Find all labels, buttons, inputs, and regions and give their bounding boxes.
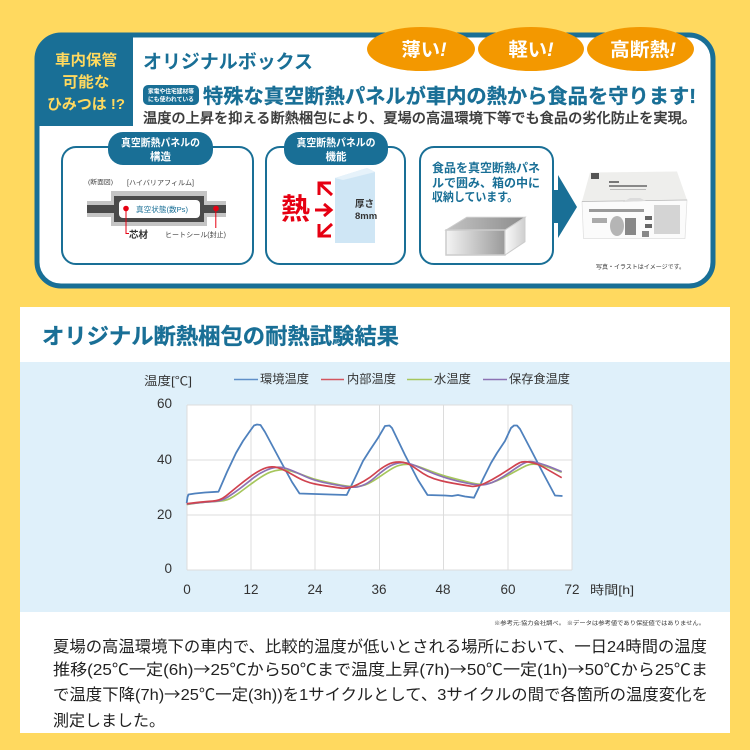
card: structure <box>62 132 253 264</box>
badge: light <box>478 27 584 71</box>
card text: 食品を真空断熱パネ <box>432 160 540 175</box>
badge: also used in appliances <box>143 85 199 105</box>
card heading: 真空断熱パネルの <box>121 136 200 149</box>
axis labels: 12 <box>243 582 259 597</box>
body text: 測定しました。 <box>53 712 165 730</box>
axis labels: 温度[℃] <box>144 374 192 388</box>
legend: 水温度 <box>434 372 471 386</box>
left tab: 車内保管 <box>55 51 117 69</box>
body text <box>53 638 708 730</box>
heading: オリジナル断熱梱包の耐熱試験結果 <box>42 324 399 349</box>
axis labels: 48 <box>435 582 451 597</box>
axis labels: 0 <box>164 561 172 576</box>
cross-section diagram: 芯材 <box>129 229 148 241</box>
legend: 保存食温度 <box>509 372 570 386</box>
body text: で温度下降(7h)→25℃一定(3h))を1サイクルとして、3サイクルの間で各箇所の温度変化を <box>53 681 708 705</box>
axis labels: 24 <box>307 582 323 597</box>
cross-section diagram: [ハイバリアフィルム] <box>127 179 194 187</box>
body text: 推移(25℃一定(6h) →25℃から50℃まで温度上昇(7h) →50℃一定(1h) →50℃から25℃ま <box>53 656 708 680</box>
headline: 特殊な真空断熱パネルが車内の熱から食品を守ります! <box>203 84 696 108</box>
insulation panel: 厚さ <box>355 199 374 210</box>
card heading: 真空断熱パネルの <box>296 136 376 149</box>
insulation panel: 8mm <box>355 211 377 222</box>
axis labels: 60 <box>500 582 516 597</box>
axis labels: 0 <box>183 582 191 597</box>
legend <box>234 372 570 386</box>
card heading <box>108 132 213 165</box>
card: stored in box <box>420 147 553 264</box>
line: ambient temperature <box>187 424 562 503</box>
line: stored food temperature <box>187 462 562 504</box>
chart: temperature <box>20 362 730 612</box>
axis labels: 60 <box>157 396 172 411</box>
card text: 収納しています。 <box>432 189 518 204</box>
axis labels: 20 <box>157 507 172 522</box>
line: water temperature <box>187 464 562 504</box>
left tab: ひみつは !? <box>47 96 125 113</box>
cross-section diagram: 真空状態(数Ps) <box>136 204 189 214</box>
left tab <box>37 35 133 126</box>
heading: original box: オリジナルボックス <box>143 51 313 73</box>
axis labels: 時間[h] <box>590 583 634 597</box>
badge: also used in appliances: 家電や住宅建材等 <box>148 88 194 96</box>
footnote: ※参考元:協力会社調べ。 ※データは参考値であり保証値ではありません。 <box>494 619 705 627</box>
card text <box>432 160 540 204</box>
axis labels: 40 <box>157 452 172 467</box>
heat label: 熱 <box>281 193 310 226</box>
axis labels: 72 <box>564 582 580 597</box>
photo: product box <box>582 172 687 238</box>
card text: ルで囲み、箱の中に <box>432 175 540 190</box>
panel: heat test result <box>20 307 730 733</box>
arrows: heat reflected <box>315 183 332 236</box>
icon: silver panel box <box>446 217 525 255</box>
panel: original box <box>37 27 713 286</box>
cross-section diagram: ヒートシール(封止) <box>165 230 226 239</box>
axis labels <box>144 374 634 597</box>
cross-section diagram: (断面図) <box>88 177 113 186</box>
cross-section diagram <box>87 177 226 241</box>
badge: high insulation: 高断熱! <box>610 39 676 61</box>
description: 温度の上昇を抑える断熱梱包により、夏場の高温環境下等でも食品の劣化防止を実現。 <box>143 110 696 126</box>
axis labels: 36 <box>371 582 387 597</box>
badge: thin <box>367 27 475 71</box>
line: internal temperature <box>187 462 562 504</box>
card heading: 機能 <box>326 150 347 163</box>
body text: 夏場の高温環境下の車内で、比較的温度が低いとされる場所において、一日24時間の温度 <box>53 638 707 656</box>
insulation panel <box>335 168 377 243</box>
badge: also used in appliances: にも使われている <box>148 96 194 104</box>
card: function <box>266 132 405 264</box>
badge: high insulation <box>587 27 694 71</box>
legend: 内部温度 <box>347 372 396 386</box>
legend: 環境温度 <box>260 372 309 386</box>
photo note: 写真・イラストはイメージです。 <box>596 263 685 271</box>
plot area <box>187 405 572 570</box>
card heading <box>284 132 388 165</box>
arrow: to box <box>553 175 577 238</box>
left tab: 可能な <box>62 73 110 91</box>
badge: thin: 薄い! <box>402 39 446 61</box>
card heading: 構造 <box>150 150 171 163</box>
badge: light: 軽い! <box>508 39 554 61</box>
